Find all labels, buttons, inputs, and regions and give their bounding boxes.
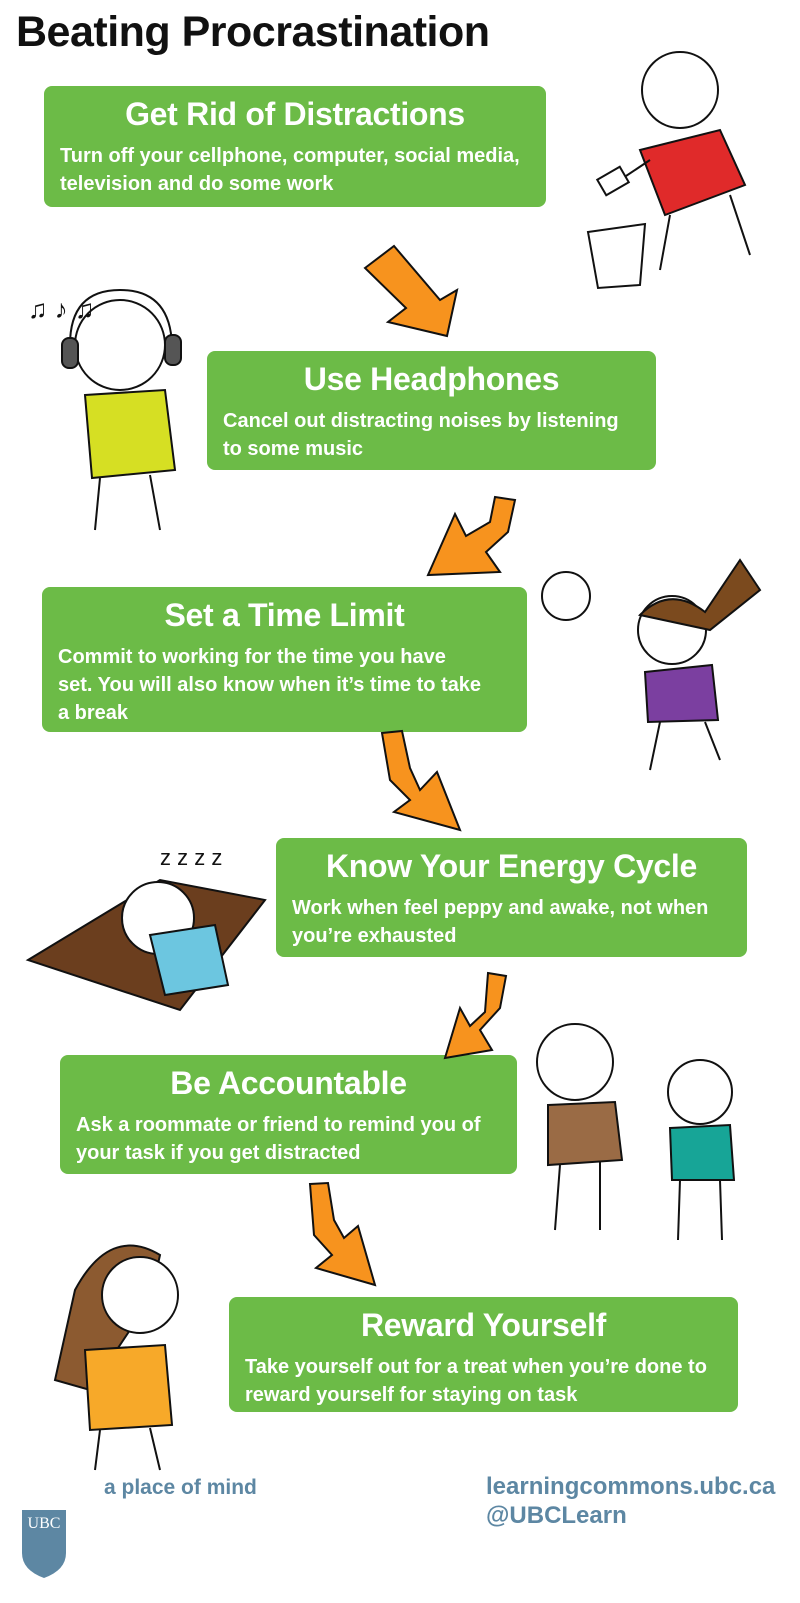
footer: contact — [486, 1473, 776, 1529]
figure: sleeping person — [28, 845, 265, 1010]
footer: tagline: a place of mind — [104, 1476, 257, 1499]
box: set a time limit: a break — [58, 702, 128, 724]
figure: red shirt person — [588, 52, 750, 288]
box: be accountable — [60, 1055, 517, 1174]
box: reward yourself — [229, 1297, 738, 1412]
box: get rid of distractions: Get Rid of Distractions — [125, 96, 465, 132]
box: reward yourself: Take yourself out for a treat when you’re done to — [245, 1356, 707, 1378]
footer: contact: @UBCLearn — [486, 1502, 627, 1529]
footer: contact: learningcommons.ubc.ca — [486, 1473, 775, 1500]
title: Beating Procrastination — [16, 8, 490, 56]
footer: UBC logo: UBC — [28, 1515, 60, 1532]
box: reward yourself: reward yourself for staying on task — [245, 1384, 577, 1406]
box: set a time limit: Set a Time Limit — [164, 597, 404, 633]
box: use headphones: to some music — [223, 438, 363, 460]
box: set a time limit — [42, 587, 527, 732]
arrow 5 — [310, 1183, 375, 1285]
figure: headphones person — [28, 290, 181, 530]
arrow 4 — [445, 973, 506, 1058]
figure: two people — [537, 1024, 734, 1240]
arrow 3 — [382, 731, 460, 830]
box: reward yourself: Reward Yourself — [361, 1307, 606, 1343]
box: set a time limit: Commit to working for the time you have — [58, 646, 446, 668]
box: know your energy cycle: you’re exhausted — [292, 925, 457, 947]
box: get rid of distractions — [44, 86, 546, 207]
box: know your energy cycle: Know Your Energy Cycle — [326, 848, 697, 884]
figure: ponytail person with clock — [542, 560, 760, 770]
figure: sleeping person: z z z z — [160, 845, 222, 870]
box: get rid of distractions: television and do some work — [60, 173, 333, 195]
box: be accountable: your task if you get distracted — [76, 1142, 361, 1164]
box: know your energy cycle: Work when feel peppy and awake, not when — [292, 897, 708, 919]
footer: UBC logo — [22, 1510, 66, 1578]
box: use headphones: Use Headphones — [304, 361, 559, 397]
box: use headphones — [207, 351, 656, 470]
box: know your energy cycle — [276, 838, 747, 957]
figure: headphones person: ♫ ♪ ♫ — [28, 294, 94, 324]
arrow 1 — [365, 246, 457, 336]
box: set a time limit: set. You will also know when it’s time to take — [58, 674, 481, 696]
box: use headphones: Cancel out distracting noises by listening — [223, 410, 619, 432]
arrow 2 — [428, 497, 515, 575]
figure: long hair person — [55, 1246, 178, 1470]
box: get rid of distractions: Turn off your cellphone, computer, social media, — [60, 145, 520, 167]
box: be accountable: Ask a roommate or friend to remind you of — [76, 1114, 481, 1136]
box: be accountable: Be Accountable — [170, 1065, 407, 1101]
